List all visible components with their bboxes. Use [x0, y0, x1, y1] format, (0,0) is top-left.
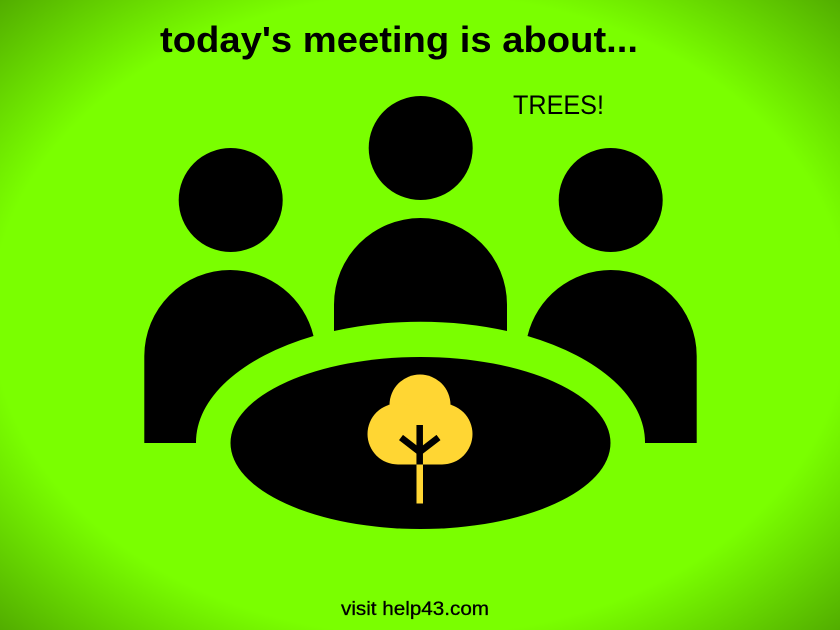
title: today's meeting is about...	[160, 19, 638, 60]
person: center	[334, 96, 507, 331]
label: trees: TREES!	[513, 90, 604, 120]
table	[230, 357, 610, 529]
icon: tree	[368, 374, 472, 504]
person: right	[528, 148, 697, 443]
footer: visit help43.com	[341, 599, 489, 620]
person: left	[144, 148, 314, 443]
